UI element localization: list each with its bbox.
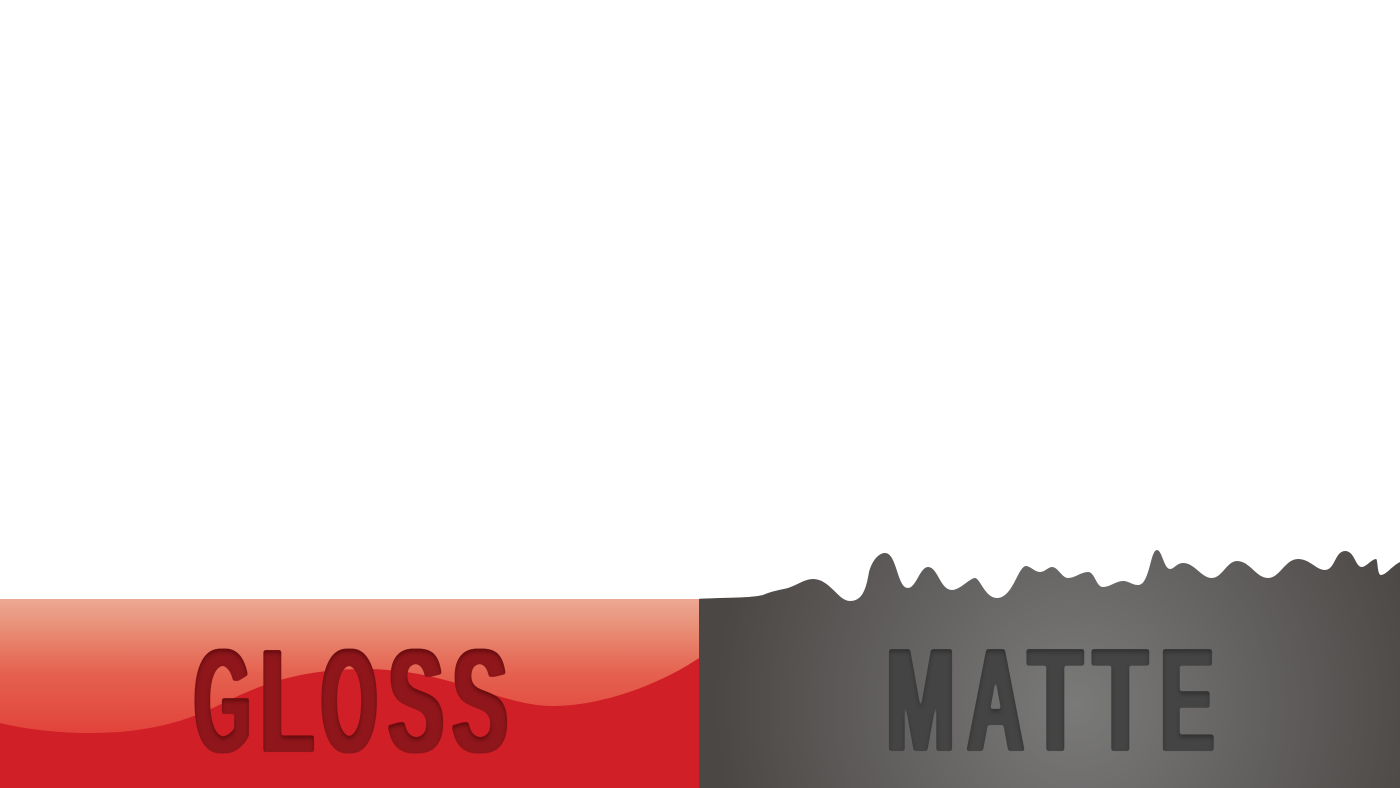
heading: MATTE: A (967, 618, 1024, 783)
heading: GLOSS (194, 619, 508, 784)
heading: MATTE: E (1160, 618, 1214, 783)
heading: MATTE: M (886, 618, 955, 783)
heading: GLOSS: O (320, 619, 377, 784)
heading: MATTE (886, 618, 1214, 783)
panel: matte grey paint with rough top edge (699, 550, 1400, 788)
heading: MATTE: T (1028, 618, 1083, 783)
heading: MATTE: T (1093, 618, 1148, 783)
heading: GLOSS: S (388, 619, 444, 784)
panel: gloss red base (0, 599, 699, 788)
heading: GLOSS: L (260, 619, 314, 784)
heading: GLOSS: G (194, 619, 251, 784)
heading: GLOSS: S (452, 619, 508, 784)
gloss highlight wave (0, 599, 699, 733)
